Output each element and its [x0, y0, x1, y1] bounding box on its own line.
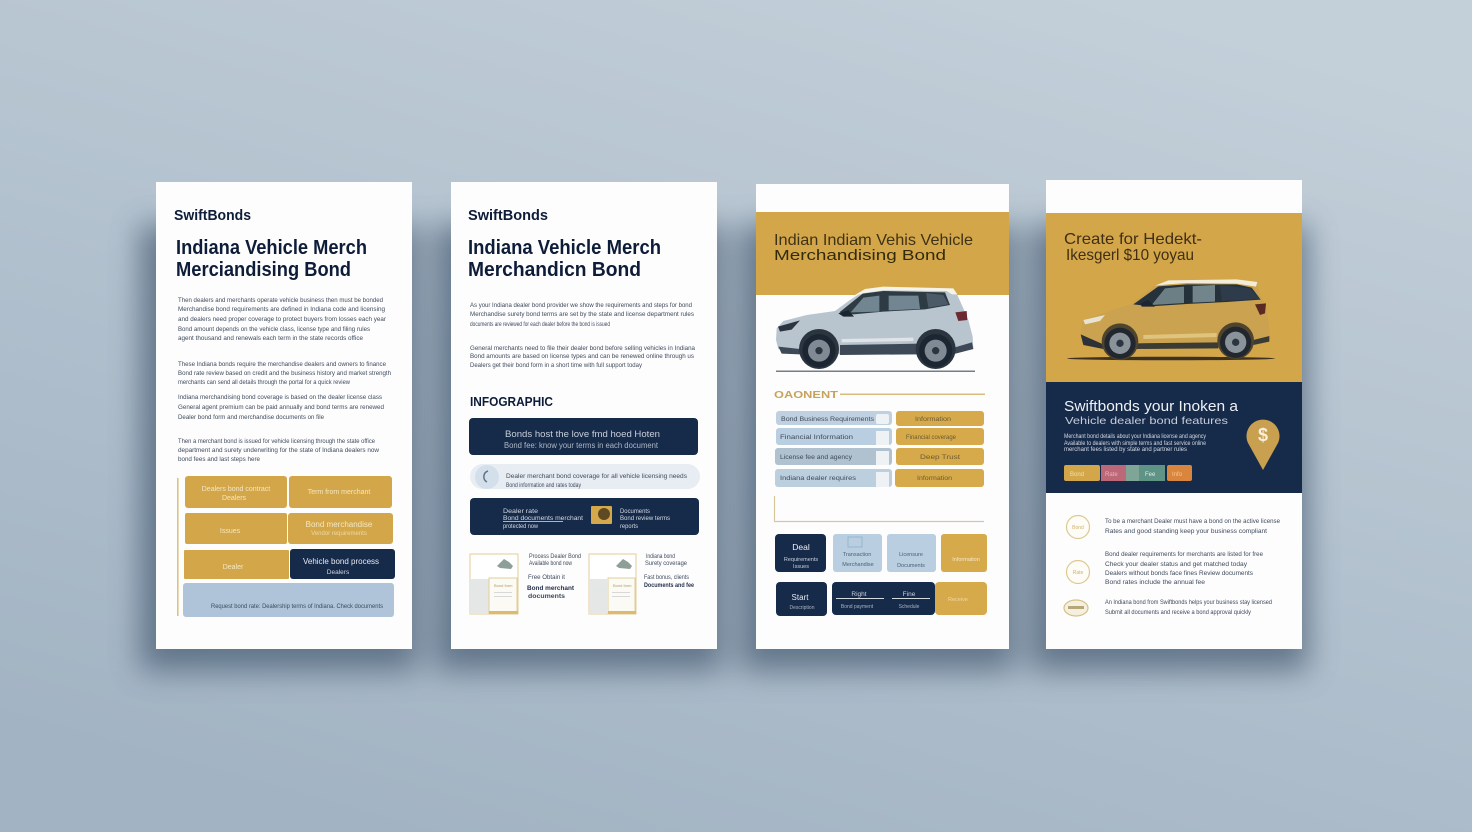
title: Merciandising Bond [176, 259, 351, 281]
header title: Merchandising Bond [774, 247, 946, 264]
icon: location pin [1246, 420, 1279, 470]
heading: infographic: INFOGRAPHIC [470, 395, 553, 409]
title: Indiana Vehicle Merch [468, 237, 661, 259]
feature tiles row 2: Right [851, 591, 867, 598]
benefit 2: Check your dealer status and get matched today [1105, 561, 1248, 568]
navy section [1046, 382, 1302, 493]
header title: Create for Hedekt- [1064, 231, 1202, 248]
document thumbnail left [470, 554, 518, 614]
icon: gold badge [591, 506, 612, 524]
comparison rows [775, 411, 984, 487]
body text: General merchants need to file their dealer bond before selling vehicles in Indiana [470, 345, 695, 352]
table of bond details [177, 476, 395, 617]
body text: Indiana merchandising bond coverage is based on the dealer license class [178, 394, 383, 401]
body text: and dealers need proper coverage to protect buyers from losses each year [178, 316, 387, 323]
panel: card 3 silver car [756, 184, 1009, 649]
header title [774, 232, 973, 264]
navy section text: merchant fees listed by state and partner rules [1064, 446, 1188, 453]
thumbnail text left: Process Dealer Bond [529, 553, 581, 560]
comparison rows: Information [915, 416, 951, 423]
feature tiles row 1: Licensure [899, 552, 923, 558]
title: Indiana Vehicle Merch [176, 237, 367, 259]
navy details bar: Bond review terms [620, 515, 671, 522]
navy section text [1064, 399, 1239, 453]
pill callout: Bond information and rates today [506, 482, 582, 489]
navy section text: Vehicle dealer bond features [1065, 415, 1228, 427]
logo: SwiftBonds [174, 207, 251, 224]
body text: bond fees and last steps here [178, 456, 260, 463]
feature tiles row 2: Schedule [899, 604, 920, 610]
feature tiles row 2 [776, 582, 987, 616]
feature tiles row 1: Transaction [843, 552, 871, 558]
navy details bar: Documents [620, 508, 651, 515]
table of bond details: Dealers [327, 569, 350, 576]
comparison rows: Bond Business Requirements [781, 416, 875, 423]
navy section text: Available to dealers with simple terms and fast service online [1064, 440, 1206, 447]
body text: Merchandise surety bond terms are set by the state and license department rules [470, 311, 695, 318]
benefit 3 [1064, 599, 1272, 616]
feature tiles row 1: Issues [793, 564, 809, 570]
thumbnail text left [527, 553, 581, 600]
ground shadow [1067, 357, 1275, 360]
thumbnail text right: Indiana bond [646, 553, 675, 560]
benefit 3: Submit all documents and receive a bond approval quickly [1105, 609, 1252, 616]
benefit 1: Rates and good standing keep your business compliant [1105, 528, 1267, 535]
panel: card 1 text and table [156, 182, 412, 649]
navy banner: Bonds host the love fmd hoed Hoten [505, 429, 660, 440]
benefit 3: An Indiana bond from Swiftbonds helps your business stay licensed [1105, 599, 1272, 606]
comparison rows: Financial coverage [906, 434, 956, 441]
thumbnail text left: documents [528, 593, 565, 600]
table of bond details: Dealers [222, 495, 247, 502]
colour chips: Fee [1145, 472, 1156, 478]
panel: card 4 gold car [1046, 180, 1302, 649]
feature tiles row 1: Documents [897, 563, 925, 569]
comparison rows: Information [917, 475, 952, 482]
navy banner: Bond fee: know your terms in each document [504, 441, 659, 450]
body text: Merchandise bond requirements are defined in Indiana code and licensing [178, 306, 385, 313]
benefit 2: Dealers without bonds face fines Review documents [1105, 570, 1254, 577]
pill callout [470, 464, 700, 489]
header title [1064, 231, 1202, 264]
thumbnail text left: Free Obtain it [528, 574, 565, 581]
gold header [756, 212, 1009, 295]
feature tiles row 1: Merchandise [842, 562, 874, 568]
comparison rows: License fee and agency [780, 454, 853, 461]
benefit 1: To be a merchant Dealer must have a bond on the active license [1105, 518, 1280, 525]
feature tiles row 1 [775, 534, 987, 572]
navy section text: Swiftbonds your Inoken a [1064, 399, 1239, 415]
benefit 1 [1066, 516, 1280, 538]
body text: Bond amounts are based on license types and can be renewed online through us [470, 353, 695, 360]
section heading: OAONENT [774, 390, 838, 401]
title: Merchandicn Bond [468, 259, 641, 281]
navy details bar: Bond documents merchant [503, 515, 583, 522]
colour chips [1064, 465, 1192, 481]
comparison rows: Financial Information [780, 434, 853, 441]
header title: Indian Indiam Vehis Vehicle [774, 232, 973, 249]
card shadows [140, 225, 1308, 671]
thumbnail text right [644, 553, 694, 589]
comparison rows: Indiana dealer requires [780, 475, 857, 482]
table of bond details: Issues [220, 528, 241, 535]
colour chips: Bond [1070, 472, 1084, 478]
pill callout: Dealer merchant bond coverage for all vehicle licensing needs [506, 473, 688, 480]
feature tiles row 2: Start [792, 593, 809, 602]
table of bond details: Dealer [223, 564, 244, 571]
body text: merchants can send all details through the portal for a quick review [178, 379, 350, 386]
table of bond details: Request bond rate: Dealership terms of Indiana. Check documents [211, 603, 384, 610]
body text: Bond amount depends on the vehicle class, license type and filing rules [178, 326, 371, 333]
navy details bar [470, 498, 699, 535]
benefit 2: Rate [1073, 570, 1083, 576]
body text: department and surety underwriting for the state of Indiana dealers now [178, 447, 379, 454]
feature tiles row 2: Fine [903, 591, 916, 598]
navy banner [469, 418, 698, 455]
title [176, 237, 367, 281]
body text: Dealer bond form and merchandise documents on file [178, 414, 324, 421]
header title: Ikesgerl $10 yoyau [1066, 247, 1194, 264]
icon: silver SUV [776, 287, 973, 369]
body text: Then a merchant bond is issued for vehicle licensing through the state office [178, 438, 375, 445]
panel: card 2 infographic [451, 182, 717, 649]
title [468, 237, 661, 281]
navy details bar: reports [620, 523, 639, 530]
body text: These Indiana bonds require the merchandise dealers and owners to finance [178, 361, 386, 368]
comparison rows: Deep Trust [920, 454, 960, 461]
navy details bar: Dealer rate [503, 508, 538, 515]
body text: agent thousand and renewals each term in the state records office [178, 335, 363, 342]
table of bond details: Vendor requirements [311, 531, 367, 537]
table of bond details: Vehicle bond process [303, 557, 379, 566]
gold header [1046, 213, 1302, 382]
body text [470, 302, 695, 369]
navy section text: Merchant bond details about your Indiana license and agency [1064, 433, 1207, 440]
empty bracket [774, 496, 984, 522]
logo: SwiftBonds [468, 207, 548, 224]
benefit 2 [1066, 551, 1263, 586]
colour chips: Info [1172, 472, 1183, 478]
table of bond details: Term from merchant [308, 489, 370, 496]
navy details bar: protected now [503, 523, 538, 530]
icon: gold SUV [1081, 279, 1269, 360]
feature tiles row 2: Description [789, 605, 815, 611]
thumbnail text right: Documents and fee [644, 582, 694, 589]
document thumbnail right [589, 554, 636, 614]
thumbnail text left: Bond merchant [527, 585, 575, 592]
benefit 2: Bond dealer requirements for merchants are listed for free [1105, 551, 1263, 558]
benefit 2: Bond rates include the annual fee [1105, 579, 1205, 586]
feature tiles row 2: Receive [948, 597, 968, 603]
document thumbnail left: Bond form [494, 583, 513, 588]
thumbnail text left: Available bond now [529, 560, 572, 567]
body text: General agent premium can be paid annually and bond terms are renewed [178, 404, 384, 411]
body text: Dealers get their bond form in a short time with full support today [470, 362, 643, 369]
benefit 1: Bond [1072, 525, 1084, 531]
table of bond details: Dealers bond contract [202, 486, 270, 493]
feature tiles row 1: Requirements [784, 557, 818, 563]
ground line [776, 370, 975, 372]
icon: location pin: $ [1258, 425, 1268, 445]
thumbnail text right: Surety coverage [645, 560, 687, 567]
body text: documents are reviewed for each dealer before the bond is issued [470, 321, 610, 328]
body text: Then dealers and merchants operate vehicle business then must be bonded [178, 297, 383, 304]
feature tiles row 1: Information [952, 557, 980, 563]
body text: Bond rate review based on credit and the business history and market strength [178, 370, 391, 377]
body text: As your Indiana dealer bond provider we show the requirements and steps for bond [470, 302, 692, 309]
feature tiles row 2: Bond payment [841, 604, 874, 610]
body text [178, 297, 391, 463]
document thumbnail right: Bond form [613, 583, 632, 588]
colour chips: Rate [1105, 472, 1118, 478]
table of bond details: Bond merchandise [306, 520, 373, 529]
thumbnail text right: Fast bonus, clients [644, 574, 690, 581]
feature tiles row 1: Deal [792, 542, 810, 552]
